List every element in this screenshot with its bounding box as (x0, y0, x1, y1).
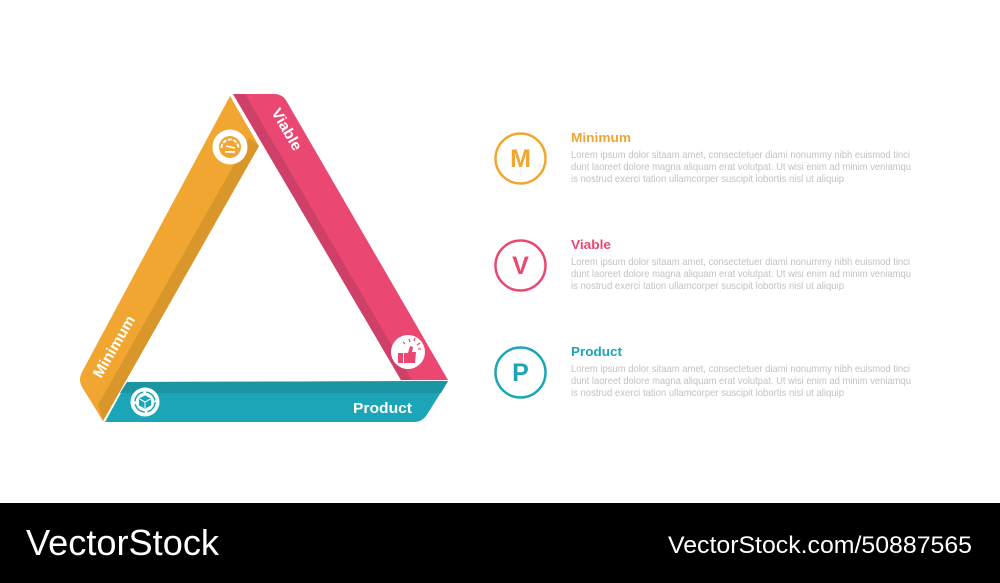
item: Minimum (496, 130, 911, 185)
icon: thumbs up (391, 335, 425, 369)
item: Product (496, 344, 911, 399)
badge P (496, 348, 546, 398)
badge V: V (512, 252, 529, 280)
badge M: M (510, 145, 531, 173)
heading: Product: Product (571, 344, 623, 359)
label: Viable: Viable (268, 106, 305, 154)
label: Product: Product (353, 400, 412, 417)
description: Product: is nostrud exerci tation ullamcorper suscipit lobortis nisl ut aliquip (571, 388, 844, 399)
heading: Viable: Viable (571, 237, 611, 252)
item: Viable (496, 237, 911, 292)
icon: speedometer (212, 130, 248, 164)
footer url: VectorStock.com/50887565 (668, 532, 972, 559)
heading: Minimum: Minimum (571, 130, 631, 145)
badge M (496, 134, 546, 184)
band: Viable (pink) (233, 94, 448, 380)
icon: box cycle (130, 388, 160, 416)
description: Product: Lorem ipsum dolor sitaam amet, consectetuer diami nonummy nibh euismod tinci (571, 364, 910, 375)
footer bar (0, 503, 1000, 583)
description: Viable: dunt laoreet dolore magna aliquam erat volutpat. Ut wisi enim ad minim veniamqu (571, 269, 911, 280)
band: Minimum (orange) (80, 96, 259, 421)
description: Minimum: is nostrud exerci tation ullamcorper suscipit lobortis nisl ut aliquip (571, 174, 844, 185)
triangle diagram (80, 94, 448, 422)
label: Minimum: Minimum (90, 313, 139, 381)
description: Minimum: Lorem ipsum dolor sitaam amet, consectetuer diami nonummy nibh euismod tinci (571, 150, 910, 161)
description: Minimum: dunt laoreet dolore magna aliquam erat volutpat. Ut wisi enim ad minim veniamqu (571, 162, 911, 173)
description: Product (571, 364, 911, 399)
footer logo text: VectorStock (26, 522, 220, 563)
band: Product (teal) (105, 381, 448, 422)
description: Product: dunt laoreet dolore magna aliquam erat volutpat. Ut wisi enim ad minim veniamqu (571, 376, 911, 387)
description: Viable: Lorem ipsum dolor sitaam amet, consectetuer diami nonummy nibh euismod tinci (571, 257, 910, 268)
badge V (496, 240, 546, 290)
description: Viable: is nostrud exerci tation ullamcorper suscipit lobortis nisl ut aliquip (571, 281, 844, 292)
badge P: P (512, 359, 529, 387)
description: Minimum (571, 150, 911, 185)
description: Viable (571, 257, 911, 292)
